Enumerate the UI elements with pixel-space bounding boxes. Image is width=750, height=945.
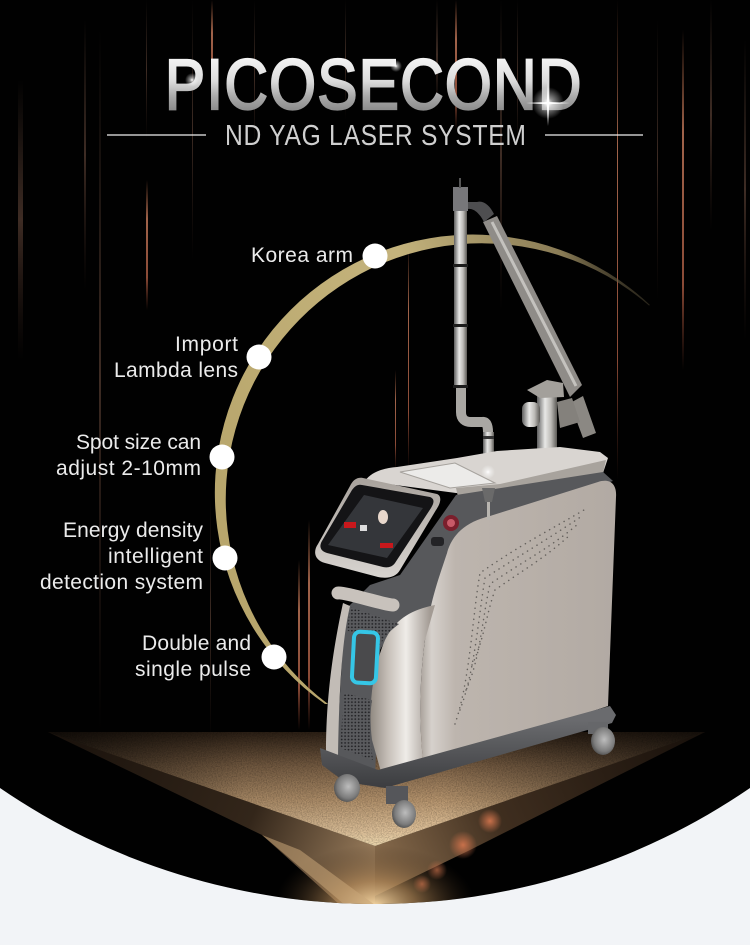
arm top cap: [453, 187, 468, 211]
background light streaks: [18, 0, 746, 740]
label: Spot size can adjust 2-10mm: [56, 431, 234, 480]
base frame: [320, 706, 616, 788]
platform right face: [375, 732, 705, 896]
label: Energy density intelligent detection system: Energy density: [63, 519, 204, 542]
right wheel: [588, 722, 608, 734]
lower vent grille: [340, 693, 373, 760]
label: Double and single pulse: single pulse: [135, 658, 251, 681]
label: Double and single pulse: [135, 632, 286, 681]
screen display: [328, 495, 423, 558]
gold arc: [215, 235, 650, 704]
upper vent grille: [347, 607, 399, 650]
arm black rings: [453, 264, 468, 388]
light beam: [262, 835, 375, 905]
main side panel: [420, 481, 616, 767]
label: Double and single pulse: Double and: [142, 632, 251, 655]
screen bezel: [315, 478, 440, 578]
platform top surface: [48, 732, 705, 846]
label: Korea arm: [251, 244, 388, 268]
left silver strip: [326, 603, 350, 758]
arm mount post: [537, 396, 557, 458]
platform left face: [48, 732, 375, 905]
screen black frame: [320, 485, 434, 567]
front centre silver panel: [371, 605, 435, 772]
mount ring: [528, 452, 566, 456]
diagonal arm segment: [483, 216, 582, 397]
key switch: [431, 537, 444, 546]
handpiece tube: [483, 432, 494, 490]
front handle: [338, 593, 393, 605]
feature labels: [40, 244, 388, 681]
handpiece tip: [481, 465, 495, 520]
lower elbow: [461, 388, 488, 432]
vertical arm segment: [454, 210, 467, 388]
top plate recess: [400, 463, 495, 488]
screen red button left: [344, 522, 356, 528]
title sparkles: [185, 60, 570, 126]
platform grain texture: [95, 732, 673, 846]
mount head: [527, 380, 564, 398]
articulated arm: [453, 178, 596, 490]
emergency stop knob: [443, 515, 459, 531]
screen centre dial: [378, 510, 388, 524]
label: Spot size can adjust 2-10mm: Spot size can: [76, 431, 201, 454]
cyan status light: [352, 631, 378, 684]
laser machine: [315, 178, 616, 828]
label: Import Lambda lens: [114, 333, 272, 382]
wheels: [334, 722, 615, 828]
screen readout: [360, 525, 367, 531]
label: Import Lambda lens: Import: [175, 333, 238, 356]
subtitle: ND YAG LASER SYSTEM: ND YAG LASER SYSTEM: [225, 119, 526, 151]
perforated vent pattern: [455, 510, 584, 724]
label: Energy density intelligent detection system: [40, 519, 238, 594]
label: Import Lambda lens: Lambda lens: [114, 359, 238, 382]
label: Energy density intelligent detection system: intelligent: [108, 545, 203, 568]
platform: [48, 732, 704, 904]
upper joint: [457, 202, 494, 222]
bottom glow: [285, 850, 465, 904]
screen red button right: [380, 543, 393, 548]
front wheel: [386, 786, 408, 804]
title: PICOSECOND: PICOSECOND: [165, 44, 581, 124]
mount lower block: [570, 396, 596, 438]
dark body: [336, 472, 613, 778]
top plate front lip: [456, 460, 606, 497]
label: Spot size can adjust 2-10mm: adjust 2-10mm: [56, 457, 201, 480]
mount left cylinder: [522, 402, 540, 427]
label: Energy density intelligent detection system: detection system: [40, 571, 203, 594]
label: Korea arm: Korea arm: [251, 244, 353, 267]
touchscreen unit: [315, 478, 440, 578]
platform corner shading: [48, 732, 705, 846]
machine top plate: [365, 447, 608, 493]
orange reflections: [413, 809, 502, 893]
left wheel: [334, 774, 360, 802]
